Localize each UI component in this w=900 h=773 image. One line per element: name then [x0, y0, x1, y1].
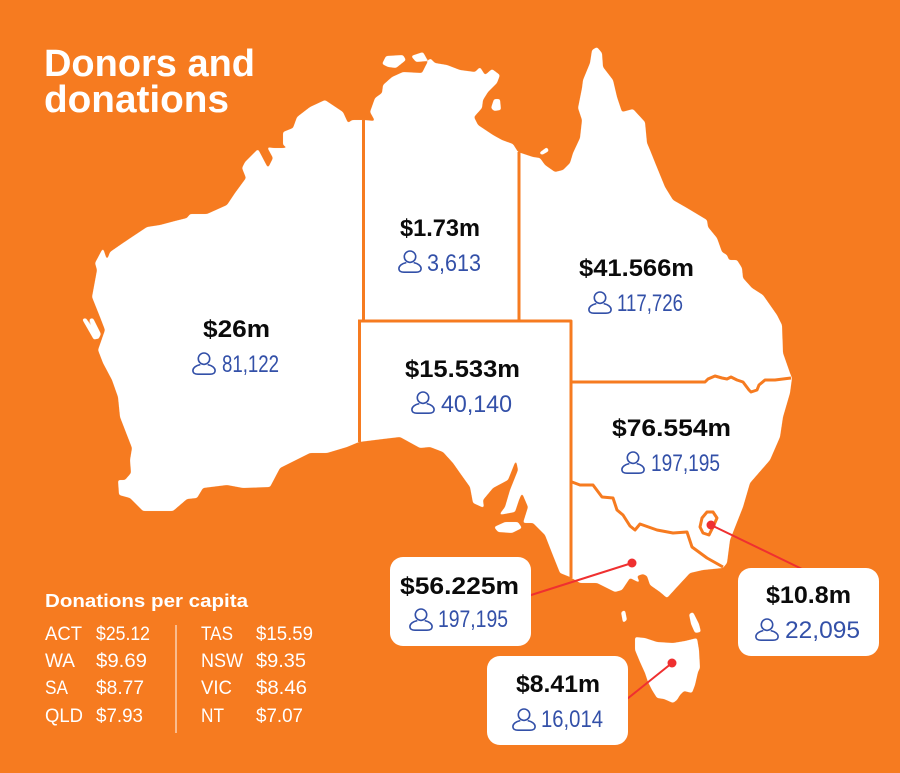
connector: Tasmania	[627, 658, 676, 699]
Shark Bay islands	[82, 318, 101, 340]
label: Queensland	[579, 255, 694, 317]
left column: WA	[45, 651, 75, 672]
label: Western Australia: 81,122	[222, 351, 279, 378]
callout: Tasmania: $8.41m	[516, 671, 600, 698]
left column	[45, 624, 150, 727]
Groote Eylandt	[491, 99, 501, 111]
callout: ACT: $10.8m	[766, 582, 851, 609]
callout: Victoria	[390, 557, 531, 646]
label: South Australia: $15.533m	[405, 356, 520, 383]
right column: $15.59	[256, 624, 313, 645]
panel heading: Donations per capita	[45, 591, 249, 611]
callout: Tasmania: 16,014	[541, 706, 603, 733]
left column: $25.12	[96, 624, 150, 645]
label: South Australia	[405, 356, 520, 418]
mainland	[92, 47, 792, 598]
right column: $7.07	[256, 706, 303, 727]
Flinders Island	[689, 612, 701, 633]
right column: NT	[201, 706, 224, 727]
left column: $8.77	[96, 678, 144, 699]
label: Queensland: $41.566m	[579, 255, 694, 282]
label: New South Wales: $76.554m	[612, 415, 731, 442]
right column: $8.46	[256, 678, 307, 699]
Tiwi islands	[382, 52, 428, 68]
right column: VIC	[201, 678, 232, 699]
King Island	[621, 610, 627, 623]
panel: donations per capita	[45, 591, 313, 733]
label: South Australia: 40,140	[441, 391, 512, 418]
label: Western Australia	[193, 316, 279, 378]
left column: SA	[45, 678, 68, 699]
connector: Victoria	[528, 558, 636, 596]
right column: TAS	[201, 624, 233, 645]
label: Queensland: 117,726	[617, 290, 683, 317]
left column: $7.93	[96, 706, 143, 727]
callout: ACT: 22,095	[785, 617, 860, 644]
connector: ACT	[706, 520, 802, 569]
Mornington Island	[539, 147, 549, 155]
left column: ACT	[45, 624, 82, 645]
callout: Tasmania	[487, 656, 628, 745]
left column: QLD	[45, 706, 83, 727]
title: donations	[44, 79, 229, 121]
right column: NSW	[201, 651, 243, 672]
label: Northern Territory: $1.73m	[400, 215, 480, 242]
Tasmania	[635, 637, 700, 703]
callout: Victoria: 197,195	[438, 606, 508, 633]
callout: Victoria: $56.225m	[400, 573, 519, 600]
title	[44, 43, 255, 121]
land masses	[82, 47, 792, 703]
label: Western Australia: $26m	[203, 316, 270, 343]
label: Northern Territory: 3,613	[427, 250, 481, 277]
Kangaroo Island	[494, 522, 522, 533]
title: Donors and	[44, 43, 255, 85]
right column: $9.35	[256, 651, 306, 672]
state borders	[358, 120, 791, 578]
left column: $9.69	[96, 651, 147, 672]
map of Australia	[82, 47, 792, 703]
label: New South Wales: 197,195	[651, 450, 720, 477]
label: New South Wales	[612, 415, 731, 477]
right column	[201, 624, 313, 727]
label: Northern Territory	[399, 215, 481, 277]
callout: ACT	[738, 568, 879, 656]
